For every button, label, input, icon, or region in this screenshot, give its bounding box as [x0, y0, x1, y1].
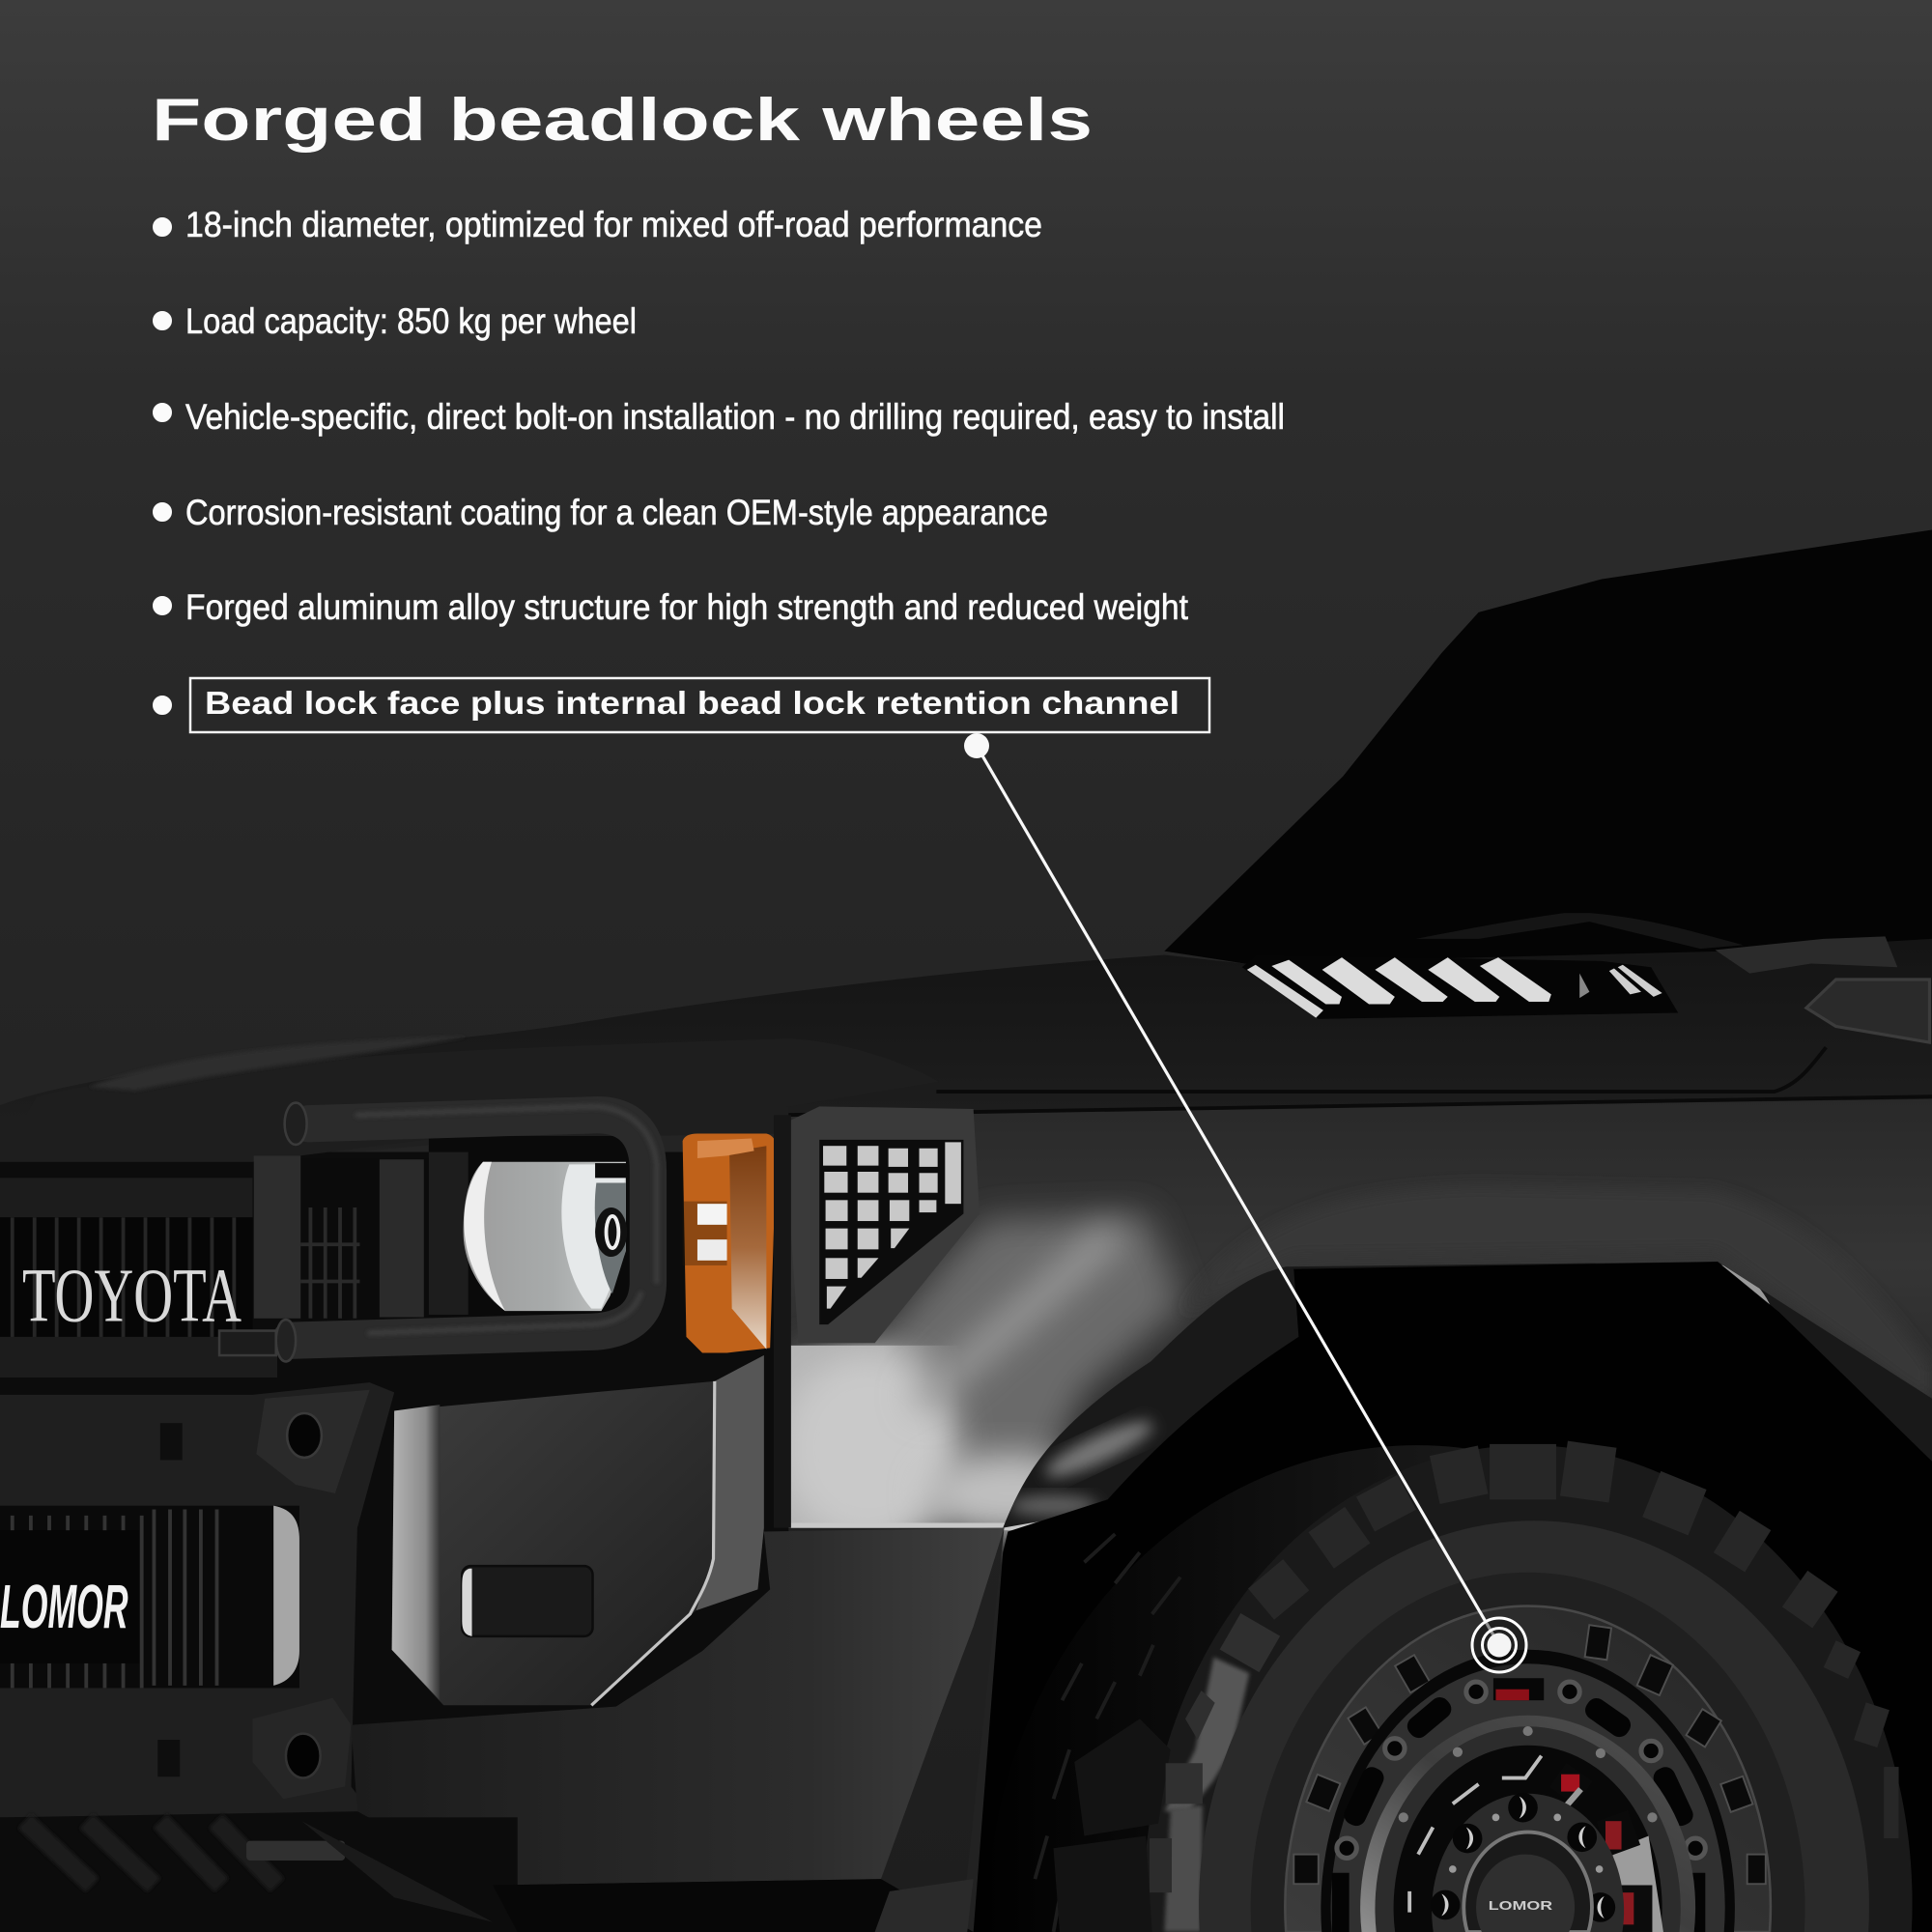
rim barrel	[1331, 1663, 1725, 1932]
left tread grooves	[1035, 1534, 1180, 1932]
hood nose panel	[0, 1038, 939, 1158]
hood	[0, 939, 1932, 1182]
rim face ring	[1375, 1726, 1681, 1932]
bull bar	[254, 1103, 657, 1361]
bumper lower edge	[493, 1879, 974, 1932]
hub cap logo: LOMOR	[1489, 1898, 1552, 1913]
tire outer body	[1144, 1445, 1913, 1932]
body side panel	[777, 1099, 1932, 1932]
hub lug crescents	[1431, 1793, 1615, 1922]
fascia pillar gap	[774, 1115, 791, 1528]
bead bolts	[1337, 1682, 1705, 1858]
side mirror base	[1806, 980, 1929, 1042]
bullet 5: Forged aluminum alloy structure for high strength and reduced weight	[185, 587, 1189, 627]
tread lugs	[1248, 1441, 1899, 1838]
windshield wipers	[1416, 913, 1744, 949]
sidewall inner ring	[1251, 1573, 1805, 1932]
LOMOR badge: LOMOR	[0, 1572, 128, 1641]
rim brake red window	[1493, 1678, 1544, 1700]
center bumper frame	[0, 1382, 394, 1817]
tire sidewall	[1199, 1520, 1869, 1932]
lower bumper	[352, 1528, 1005, 1886]
brand lettering: TOYOTA	[22, 1254, 242, 1338]
lit lugs	[1150, 1613, 1280, 1892]
callout leader line	[964, 733, 1499, 1645]
bullet 3: Vehicle-specific, direct bolt-on installation - no drilling required, easy to install	[185, 397, 1285, 437]
bullet 2: Load capacity: 850 kg per wheel	[185, 301, 637, 341]
upper grille	[0, 1178, 252, 1343]
fog lamp box	[392, 1355, 764, 1705]
rim window highlights	[1409, 1756, 1652, 1932]
bull bar clamp	[219, 1331, 276, 1355]
bullet 1: 18-inch diameter, optimized for mixed off-road performance	[185, 205, 1042, 244]
front fascia background	[0, 1152, 788, 1932]
headlight lens	[464, 1162, 629, 1311]
silver spoke sector	[1611, 1835, 1663, 1932]
tire tread shoulder	[985, 1445, 1848, 1932]
rim inner black	[1394, 1746, 1662, 1932]
wheel target marker	[1472, 1618, 1526, 1672]
upper nose band	[0, 1106, 788, 1162]
bullet list	[153, 205, 1285, 732]
hub cap	[1476, 1855, 1575, 1932]
amber indicator	[683, 1133, 777, 1352]
vehicle illustration	[0, 529, 1932, 1932]
shoulder line	[777, 1047, 1932, 1115]
headlight housing	[429, 1136, 650, 1321]
fender mesh vent	[783, 1106, 980, 1343]
cowl strip	[1715, 936, 1897, 974]
hub cap ring	[1463, 1833, 1592, 1932]
bead ring	[1285, 1606, 1771, 1932]
title: Forged beadlock wheels	[152, 87, 1093, 154]
rim lit ring	[1360, 1716, 1695, 1932]
front wheel	[985, 1441, 1913, 1932]
skid plate slats	[0, 1817, 518, 1932]
upper tow mount	[160, 1390, 370, 1493]
side grille	[300, 1158, 429, 1321]
rim slots	[1332, 1693, 1705, 1932]
windshield	[1164, 529, 1932, 963]
lit tread band	[1164, 1658, 1249, 1932]
bead ring block marks	[1293, 1625, 1766, 1884]
bullet 6 highlighted	[153, 678, 1209, 732]
nose highlight streak	[89, 1037, 469, 1091]
rim inner black ring	[1321, 1650, 1735, 1932]
bullet 6 highlighted: Bead lock face plus internal bead lock retention channel	[205, 685, 1179, 721]
hub ring	[1432, 1794, 1624, 1932]
housing left block	[429, 1152, 469, 1315]
wheel well	[974, 1262, 1932, 1932]
rim studs	[1399, 1726, 1658, 1822]
bumper lower mount	[157, 1698, 352, 1799]
lower grille	[0, 1506, 299, 1688]
wheel arch raised band	[1182, 1185, 1932, 1405]
bullet 4: Corrosion-resistant coating for a clean OEM-style appearance	[185, 493, 1048, 532]
flare highlights	[1009, 1264, 1775, 1517]
grille lower bar	[0, 1337, 277, 1378]
fender flare lip	[1003, 1262, 1932, 1552]
silver fender highlight	[780, 1213, 1182, 1544]
hood vent	[1242, 955, 1678, 1019]
bumper corner piece	[875, 1879, 974, 1932]
left tread blocks	[1054, 1719, 1171, 1932]
